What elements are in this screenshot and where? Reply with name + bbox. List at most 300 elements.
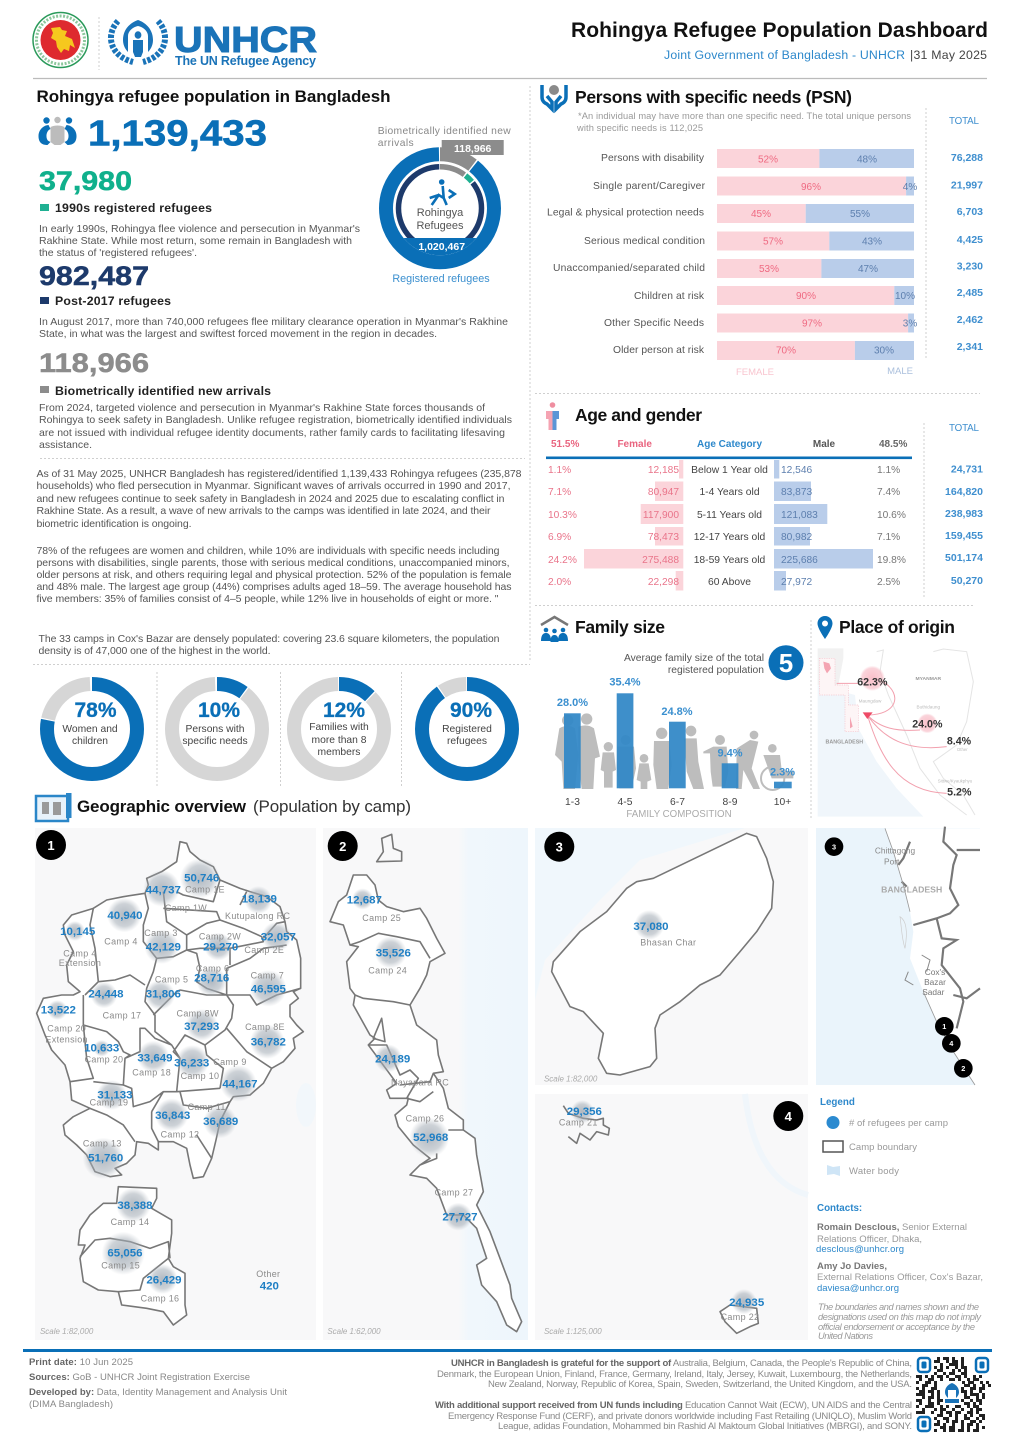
footer: acknowledgements [435,1358,912,1432]
row: 12-17 [548,527,983,546]
labels: camp names: Extension [59,958,101,968]
labels: camp names: Camp 4 [104,936,138,946]
heading: PSN: Persons with specific needs (PSN) [575,87,852,107]
row: 1-4 [548,482,983,501]
labels: camp population values: 420 [260,1280,279,1292]
row: Serious medical: 57% [763,236,783,248]
map: place of origin: Maungdaw [859,698,882,703]
logo: UNHCR: The UN Refugee Agency [175,54,316,68]
legend: Camp boundary [849,1142,917,1153]
text block: demographics: persons with disabilities, single parents, those with serious medical conditions, unaccompanied minors, [36,557,510,569]
panel: locator map: 4 [949,1039,954,1048]
text block: overview: Rakhine State. As a result, a wave of new arrivals to the camps was identified in late 2024, and their [36,505,491,517]
labels: camp population values: 32,057 [261,932,296,944]
labels: camp names: Camp 2W [199,931,241,941]
labels: camp population values: 36,689 [203,1116,238,1128]
table header: age and gender: 51.5% [551,439,579,450]
panel: map 3 Bhasan Char: Scale 1:82,000 [544,1075,598,1084]
donut: registered vs biometric: Refugees [416,220,464,232]
panel: map 4 Camps 21 and 22 [535,1094,808,1340]
panel: locator map: 2 [961,1064,965,1073]
row: 1-4: 83,873 [781,487,812,498]
footer: credits: Print date: 10 Jun 2025 [29,1357,133,1368]
panel: map 2 Teknaf camps: 27,727 [442,1211,478,1223]
row: Older person at risk [613,341,983,360]
donut: specific needs: Persons with [186,724,245,735]
map: place of origin: 24.0% [912,719,943,731]
footer: acknowledgements: League, adidas Foundation, Mohammed bin Rashid Al Maktoum Global Initiatives (MBRGI), and SONY. [498,1421,912,1432]
labels: camp population values: 28,716 [194,973,229,985]
footer: acknowledgements: New Zealand, Norway, Republic of Korea, Spain, Sweden, Switzerland, the United Kingdom, and the USA. [488,1379,912,1390]
heading: Place of origin: Place of origin [839,617,955,637]
stat: Biometrically identified new arrivals [39,348,512,451]
disclaimer [818,1302,982,1341]
donut: large families: members [318,747,360,758]
bubbles: refugees per camp [352,888,472,1231]
row: 18-59: 18-59 Years old [694,555,766,566]
stat: 1990s registered refugees: In early 1990s, Rohingya flee violence and persecution in Myanmar's [39,223,360,235]
row: 60 above: 50,270 [951,575,983,587]
panel: map 2 Teknaf camps: 52,968 [413,1132,449,1144]
row: Below 1: 24,731 [951,464,983,476]
footer: credits [29,1357,287,1410]
stat: Biometrically identified new arrivals: assistance. [39,439,92,451]
row: 60 above [548,571,983,590]
footer: credits: (DIMA Bangladesh) [29,1399,113,1410]
row: Legal & physical protection: 55% [850,209,870,220]
row: 1-4: 164,820 [945,486,983,498]
labels: camp population values: 42,129 [146,941,181,953]
heading: geographic overview [77,797,411,816]
text block: demographics: five members: 35% of families consist of 4–5 people, while 12% live in households of eight or more. " [36,593,499,605]
row: Older person at risk: Older person at risk [613,345,705,356]
donut: registered refugees: Registered [442,724,492,735]
map: place of origin: 62.3% [857,677,888,689]
stat: Post-2017 refugees: 982,487 [39,261,149,291]
labels: camp names: Camp 8E [245,1022,285,1032]
row: 5-11: 10.3% [548,510,577,521]
labels: camp population values: 38,388 [117,1200,153,1212]
labels: camp names: Camp 12 [161,1130,199,1140]
row: 12-17: 159,455 [945,530,983,542]
labels: camp names: Camp 13 [83,1138,122,1148]
labels: camp population values: 36,782 [251,1037,286,1049]
labels: camp names: Other [256,1269,280,1279]
map: place of origin: Sittwe/Kyaukphyu [938,779,973,784]
labels: camp names: Camp 1E [185,884,225,894]
note: PSN: with specific needs is 112,025 [576,123,703,133]
labels: camp population values: 10,145 [60,926,96,938]
row: 5-11: 5-11 Years old [697,510,762,521]
labels: camp names: Camp 20 [85,1054,123,1064]
donut: large families [294,684,384,774]
labels: camp population values: 36,233 [174,1058,209,1070]
row: Legal & physical protection: 45% [751,209,771,220]
chart: PSN bars [547,149,983,378]
map: place of origin: Other [957,747,968,752]
donut: registered vs biometric: 1,020,467 [418,241,465,253]
contacts: daviesa@unhcr.org [817,1283,899,1294]
row: 60 above: 2.5% [877,577,900,588]
labels: camp names: Camp 2E [244,945,284,955]
row: 1-4: 80,947 [648,487,679,498]
text block: density [38,633,500,657]
donut: registered refugees [422,684,512,774]
labels: camp population values: 40,940 [107,910,143,922]
map: place of origin: 8.4% [947,736,972,748]
row: Older person at risk: 2,341 [957,341,983,353]
row: Older person at risk: 30% [874,346,894,356]
disclaimer: The boundaries and names shown and the [818,1302,979,1312]
row: 18-59: 24.2% [548,555,577,566]
labels: camp population values: 13,522 [41,1005,76,1017]
panel: locator map: BANGLADESH [881,885,942,895]
labels: camp population values: 31,133 [97,1089,133,1101]
row: 1-4: 7.4% [877,487,900,498]
callout: average family size: registered population [668,665,764,676]
donut: registered vs biometric: Registered refugees [392,273,490,285]
bars [564,693,792,788]
row: Serious medical: 4,425 [957,234,983,246]
bar values: 9.4% [717,748,743,760]
labels: camp names: Camp 8W [177,1009,219,1019]
stat: Post-2017 refugees: Post-2017 refugees [55,294,171,308]
icon: people [38,117,76,145]
heading: Age and gender: Age and gender [575,405,702,425]
row: Legal & physical protection [547,204,983,223]
row: Below 1 [548,460,983,478]
row: 60 above: 27,972 [781,577,812,588]
panel: map 4 Camps 21 and 22: 29,356 [567,1106,602,1118]
panel: map 2 Teknaf camps: 12,687 [347,894,382,906]
text block: overview: and new refugees continue to seek safety in Bangladesh in 2024 and 2025 due to escalating conflict in [36,493,505,505]
table: age and gender rows [548,460,983,590]
row: Other specific needs: 2,462 [957,314,983,326]
panel: map 2 Teknaf camps: Camp 27 [435,1188,473,1198]
axis labels: 6-7 [670,797,685,808]
icon: age and gender [546,402,559,430]
row: Unaccompanied child: 3,230 [957,260,983,272]
map: place of origin: BANGLADESH [826,739,863,745]
labels: camp names: Camp 5 [155,974,188,984]
panel: map 3 Bhasan Char: Bhasan Char [640,938,696,948]
labels: camp population values [41,873,296,1292]
labels: camp names: Camp 10 [181,1071,219,1081]
labels: camp names: Camp 17 [103,1010,141,1020]
labels: camp names: Camp 3 [144,928,178,938]
subtitle: Joint Government of Bangladesh - UNHCR [664,48,905,62]
text block: density: The 33 camps in Cox's Bazar are densely populated: covering 23.6 square kilometers, the population [38,633,500,645]
row: Below 1: 1.1% [548,465,571,476]
row: 18-59 [548,549,983,568]
bar values: 2.3% [770,767,795,779]
labels: camp names: Camp 6 [196,964,229,974]
contacts: Relations Officer, Dhaka, [817,1234,922,1245]
row: Below 1: 12,185 [648,465,679,476]
labels: camp population values: 51,760 [88,1153,123,1165]
PSN total header: TOTAL [949,116,980,127]
table header: age and gender: Male [813,439,836,450]
row: Children at risk: 2,485 [957,287,983,299]
row: Unaccompanied child: Unaccompanied/separated child [553,263,705,274]
row: Persons with disability: 48% [857,154,877,166]
panel: locator map: Cox's [925,967,945,977]
labels: camp names: Extension [45,1034,88,1044]
bar values [557,677,795,779]
logo: UNHCR [111,19,317,68]
donut: specific needs [172,684,262,774]
donut: specific needs: specific needs [182,736,248,747]
donut: women and children: Women and [62,724,118,735]
row: 12-17: 80,982 [781,532,812,543]
disclaimer: United Nations [818,1331,873,1341]
labels: camp population values: 18,139 [242,893,277,905]
stat: 1990s registered refugees: 1990s registered refugees [55,201,212,215]
donut: large families: more than 8 [312,735,367,746]
row: Single parent: 96% [801,182,821,193]
labels: camp population values: 33,649 [137,1053,173,1065]
icon: family [541,617,568,642]
labels: camp names: Camp 20 [47,1024,86,1034]
legend [820,1097,948,1177]
panel: map 3 Bhasan Char: 37,080 [633,921,669,933]
table header: age and gender: Age Category [697,439,762,450]
labels: camp population values: 36,843 [155,1110,190,1122]
row: Children at risk: 10% [895,291,915,302]
row: Persons with disability: 76,288 [951,152,983,164]
panel: map 2 Teknaf camps: Camp 24 [368,965,407,975]
row: 18-59: 19.8% [877,555,906,566]
silhouettes: family [555,713,793,790]
labels: camp population values: 26,429 [146,1274,182,1286]
axis labels: 8-9 [723,797,738,808]
stat: Biometrically identified new arrivals: Rohingya to seek safety in Bangladesh. Unlike refugee registration, biometrically identified individuals [39,414,512,426]
chart: family size [555,677,795,820]
row: 18-59: 501,174 [945,552,983,564]
heading: geographic overview: (Population by camp) [253,797,411,816]
panel: map 2 Teknaf camps: Camp 26 [406,1114,444,1124]
labels: camp population values: 50,746 [184,873,219,885]
contacts: desclous@unhcr.org [816,1244,904,1255]
labels: camp names: Camp 16 [141,1294,179,1304]
text block: overview: As of 31 May 2025, UNHCR Bangladesh has registered/identified 1,139,433 Rohingya refugees (235,878 [36,468,522,480]
axis labels: MALE [887,366,913,377]
row: 12-17: 78,473 [648,532,679,543]
contacts [816,1203,983,1294]
row: Other specific needs: Other Specific Needs [604,318,704,329]
footer: credits: Sources: GoB - UNHCR Joint Registration Exercise [29,1372,250,1383]
labels: camp names: Camp 15 [101,1261,140,1271]
panel: map 2 Teknaf camps: Scale 1:62,000 [327,1327,381,1336]
labels: camp names: Camp 4 [63,949,97,959]
panel: map 4 Camps 21 and 22: 4 [785,1109,793,1124]
row: Below 1: Below 1 Year old [691,465,768,476]
stat: Biometrically identified new arrivals: From 2024, targeted violence and persecution in Myanmar's Rakhine State forces thousands of [39,402,485,414]
map: place of origin: Buthidaung [917,704,941,709]
donut: specific needs: 10% [198,699,240,722]
callout: average family size: Average family size of the total [624,653,764,664]
text block: demographics [36,545,512,605]
stat: 1990s registered refugees: Rakhine State. While most return, some remain in Bangladesh with [39,235,352,247]
logo: UNHCR: UNHCR [174,19,317,60]
bubbles: refugees per camp [47,858,292,1294]
row: Serious medical [584,232,983,250]
row: Unaccompanied child [553,259,983,278]
panel: locator map: 1 [942,1022,946,1031]
row: 12-17: 7.1% [877,532,900,543]
labels: camp population values: 44,167 [222,1078,258,1090]
footer rule [23,1349,992,1352]
row: 5-11: 10.6% [877,510,906,521]
panel: map 1 Kutupalong camps: Scale 1:82,000 [40,1327,94,1336]
row: 1-4: 1-4 Years old [699,487,760,498]
panel: map 2 Teknaf camps: 24,189 [375,1053,410,1065]
table header: age and gender [546,439,912,459]
QR code [916,1358,991,1431]
row: Single parent [593,176,983,196]
labels: camp population values: 65,056 [107,1248,143,1260]
donut: large families: Families with [309,722,369,733]
stat: Post-2017 refugees [39,261,508,340]
donut: women and children: 78% [74,699,117,722]
row: Children at risk [634,286,983,305]
donut: women and children [47,684,137,774]
panel: map 3 Bhasan Char [535,828,808,1085]
footer: acknowledgements: With additional support received from UN funds including Education Cannot Wait (ECW), UN AIDS and the Central [435,1400,912,1411]
contacts: Contacts: [817,1203,862,1214]
text block: demographics: and 48% male. The largest age group (44%) comprises adults aged 18–59. The average household has [36,581,512,593]
row: Legal & physical protection: Legal & physical protection needs [547,208,704,218]
contacts: External Relations Officer, Cox's Bazar, [817,1272,983,1283]
row: 60 above: 22,298 [648,577,679,588]
stat: 1990s registered refugees [39,166,360,259]
row: Children at risk: Children at risk [634,291,705,302]
footer: acknowledgements: UNHCR in Bangladesh is grateful for the support of Australia, Belgium, Canada, the People's Republic of China, [451,1358,912,1369]
axis labels [736,366,913,378]
legend: Water body [849,1166,899,1177]
row: Single parent: 21,997 [951,180,983,192]
footer: acknowledgements: Denmark, the European Union, Finland, France, Germany, Ireland, Italy, Jersey, Kuwait, Luxembourg, the Netherlands, [437,1369,912,1380]
donut: registered vs biometric: Rohingya [417,207,464,219]
axis labels: 10+ [774,797,791,808]
row: Below 1: 12,546 [781,465,812,476]
panel: locator map: Chittagong [875,845,916,855]
panel: map 2 Teknaf camps: 2 [339,839,346,854]
row: Children at risk: 90% [796,291,816,302]
disclaimer: designations used on this map do not imply [818,1312,982,1322]
panel: locator map: Port [884,856,900,866]
axis labels: 4-5 [618,797,633,808]
map: place of origin: MYANMAR [916,676,942,682]
legend: Legend [820,1097,855,1108]
panel: locator map: 3 [832,842,836,851]
contacts: Romain Desclous, Senior External [817,1222,967,1233]
text block: density: density is of 47,000 one of the highest in the world. [38,645,270,657]
stat: Post-2017 refugees: State, in what was the largest and swiftest forced movement in the region in decades. [39,328,437,340]
heading: Family size: Family size [575,617,665,637]
subtitle: |31 May 2025 [910,48,987,62]
labels: camp population values: 37,293 [184,1021,219,1033]
note: PSN [576,111,911,133]
donut: registered vs biometric: arrivals [378,138,414,149]
donut: registered refugees: 90% [450,699,492,722]
donut: registered vs biometric: Biometrically identified new [378,126,511,137]
stat: 1990s registered refugees: 37,980 [39,166,132,196]
labels: camp names: Camp 18 [132,1068,171,1078]
labels: camp names: Camp 7 [251,970,284,980]
row: Unaccompanied child: 53% [759,264,779,275]
row: Serious medical: 43% [862,236,882,248]
panel: map 1 Kutupalong camps [35,828,316,1340]
row: Other specific needs: 97% [802,318,822,330]
note: PSN: *An individual may have more than one specific need. The total unique persons [578,111,911,121]
row: Legal & physical protection: 6,703 [957,206,983,218]
row: 5-11: 121,083 [781,510,818,521]
table header: age and gender: Female [617,439,652,450]
heading: Rohingya refugee population in Bangladesh: Rohingya refugee population in Bangladesh [36,87,390,106]
labels: camp names: Camp 14 [111,1217,149,1227]
callout: average family size [624,645,804,680]
icon: geographic overview [36,793,72,821]
row: Single parent: 4% [903,182,917,193]
row: Persons with disability: 52% [758,154,778,166]
labels: camp population values: 24,448 [88,989,124,1001]
footer: acknowledgements: Emergency Response Fund (CERF), and private donors worldwide including Fast Retailing (UNIQLO), Muslim World [448,1411,912,1422]
donut: registered vs biometric [378,126,511,285]
panel: map 4 Camps 21 and 22: Camp 21 [559,1118,598,1128]
donut: large families: 12% [323,699,365,722]
text block: demographics: 78% of the refugees are women and children, while 10% are individuals with specific needs including [36,545,500,557]
labels: camp population values: 44,737 [146,884,181,896]
labels: camp population values: 46,595 [251,983,286,995]
age total header: TOTAL [949,423,980,434]
row: 5-11 [548,504,983,524]
text block: overview: households) who fled persecution in Myanmar. Significant waves of arrivals occurred in 1990 and 2017, [36,480,510,492]
row: 12-17: 6.9% [548,532,571,543]
panel: map 2 Teknaf camps [323,828,528,1340]
map: place of origin [818,648,975,817]
heading: geographic overview: Geographic overview [77,797,247,816]
logo: Government of Bangladesh emblem [33,12,88,68]
row: 12-17: 12-17 Years old [694,532,766,543]
contacts: Amy Jo Davies, [817,1261,887,1272]
icon: location pin [818,616,832,639]
legend: # of refugees per camp [849,1118,948,1129]
panel: map 4 Camps 21 and 22: Scale 1:125,000 [544,1327,602,1336]
bar values: 28.0% [557,697,588,709]
row: 5-11: 117,900 [643,510,679,521]
bar values: 24.8% [661,706,693,718]
labels: camp population values: 10,633 [84,1043,119,1055]
row: 60 above: 2.0% [548,577,571,588]
labels: camp population values: 29,270 [203,941,238,953]
donut: women and children: children [72,736,108,747]
bar values: 35.4% [609,677,641,689]
stat: Biometrically identified new arrivals: 118,966 [39,348,149,378]
labels: camp names: Camp 11 [188,1102,226,1112]
row: Persons with disability: Persons with disability [601,153,705,164]
labels: camp population values: 31,806 [146,989,181,1001]
row: 18-59: 225,686 [781,555,818,566]
row: 18-59: 275,488 [642,555,679,566]
stat: Post-2017 refugees: In August 2017, more than 740,000 refugees flee military clearance operation in Myanmar's Rakhine [39,316,508,328]
text block: overview: biometric identification is ongoing. [36,518,192,530]
text block: demographics: older persons at risk, and others requiring legal and physical protection. 52% of the population is female [36,569,512,581]
labels: camp names: Camp 1W [165,903,207,913]
text block: overview [36,468,522,530]
row: Other specific needs: 3% [903,318,917,330]
table header: age and gender: 48.5% [879,439,907,450]
